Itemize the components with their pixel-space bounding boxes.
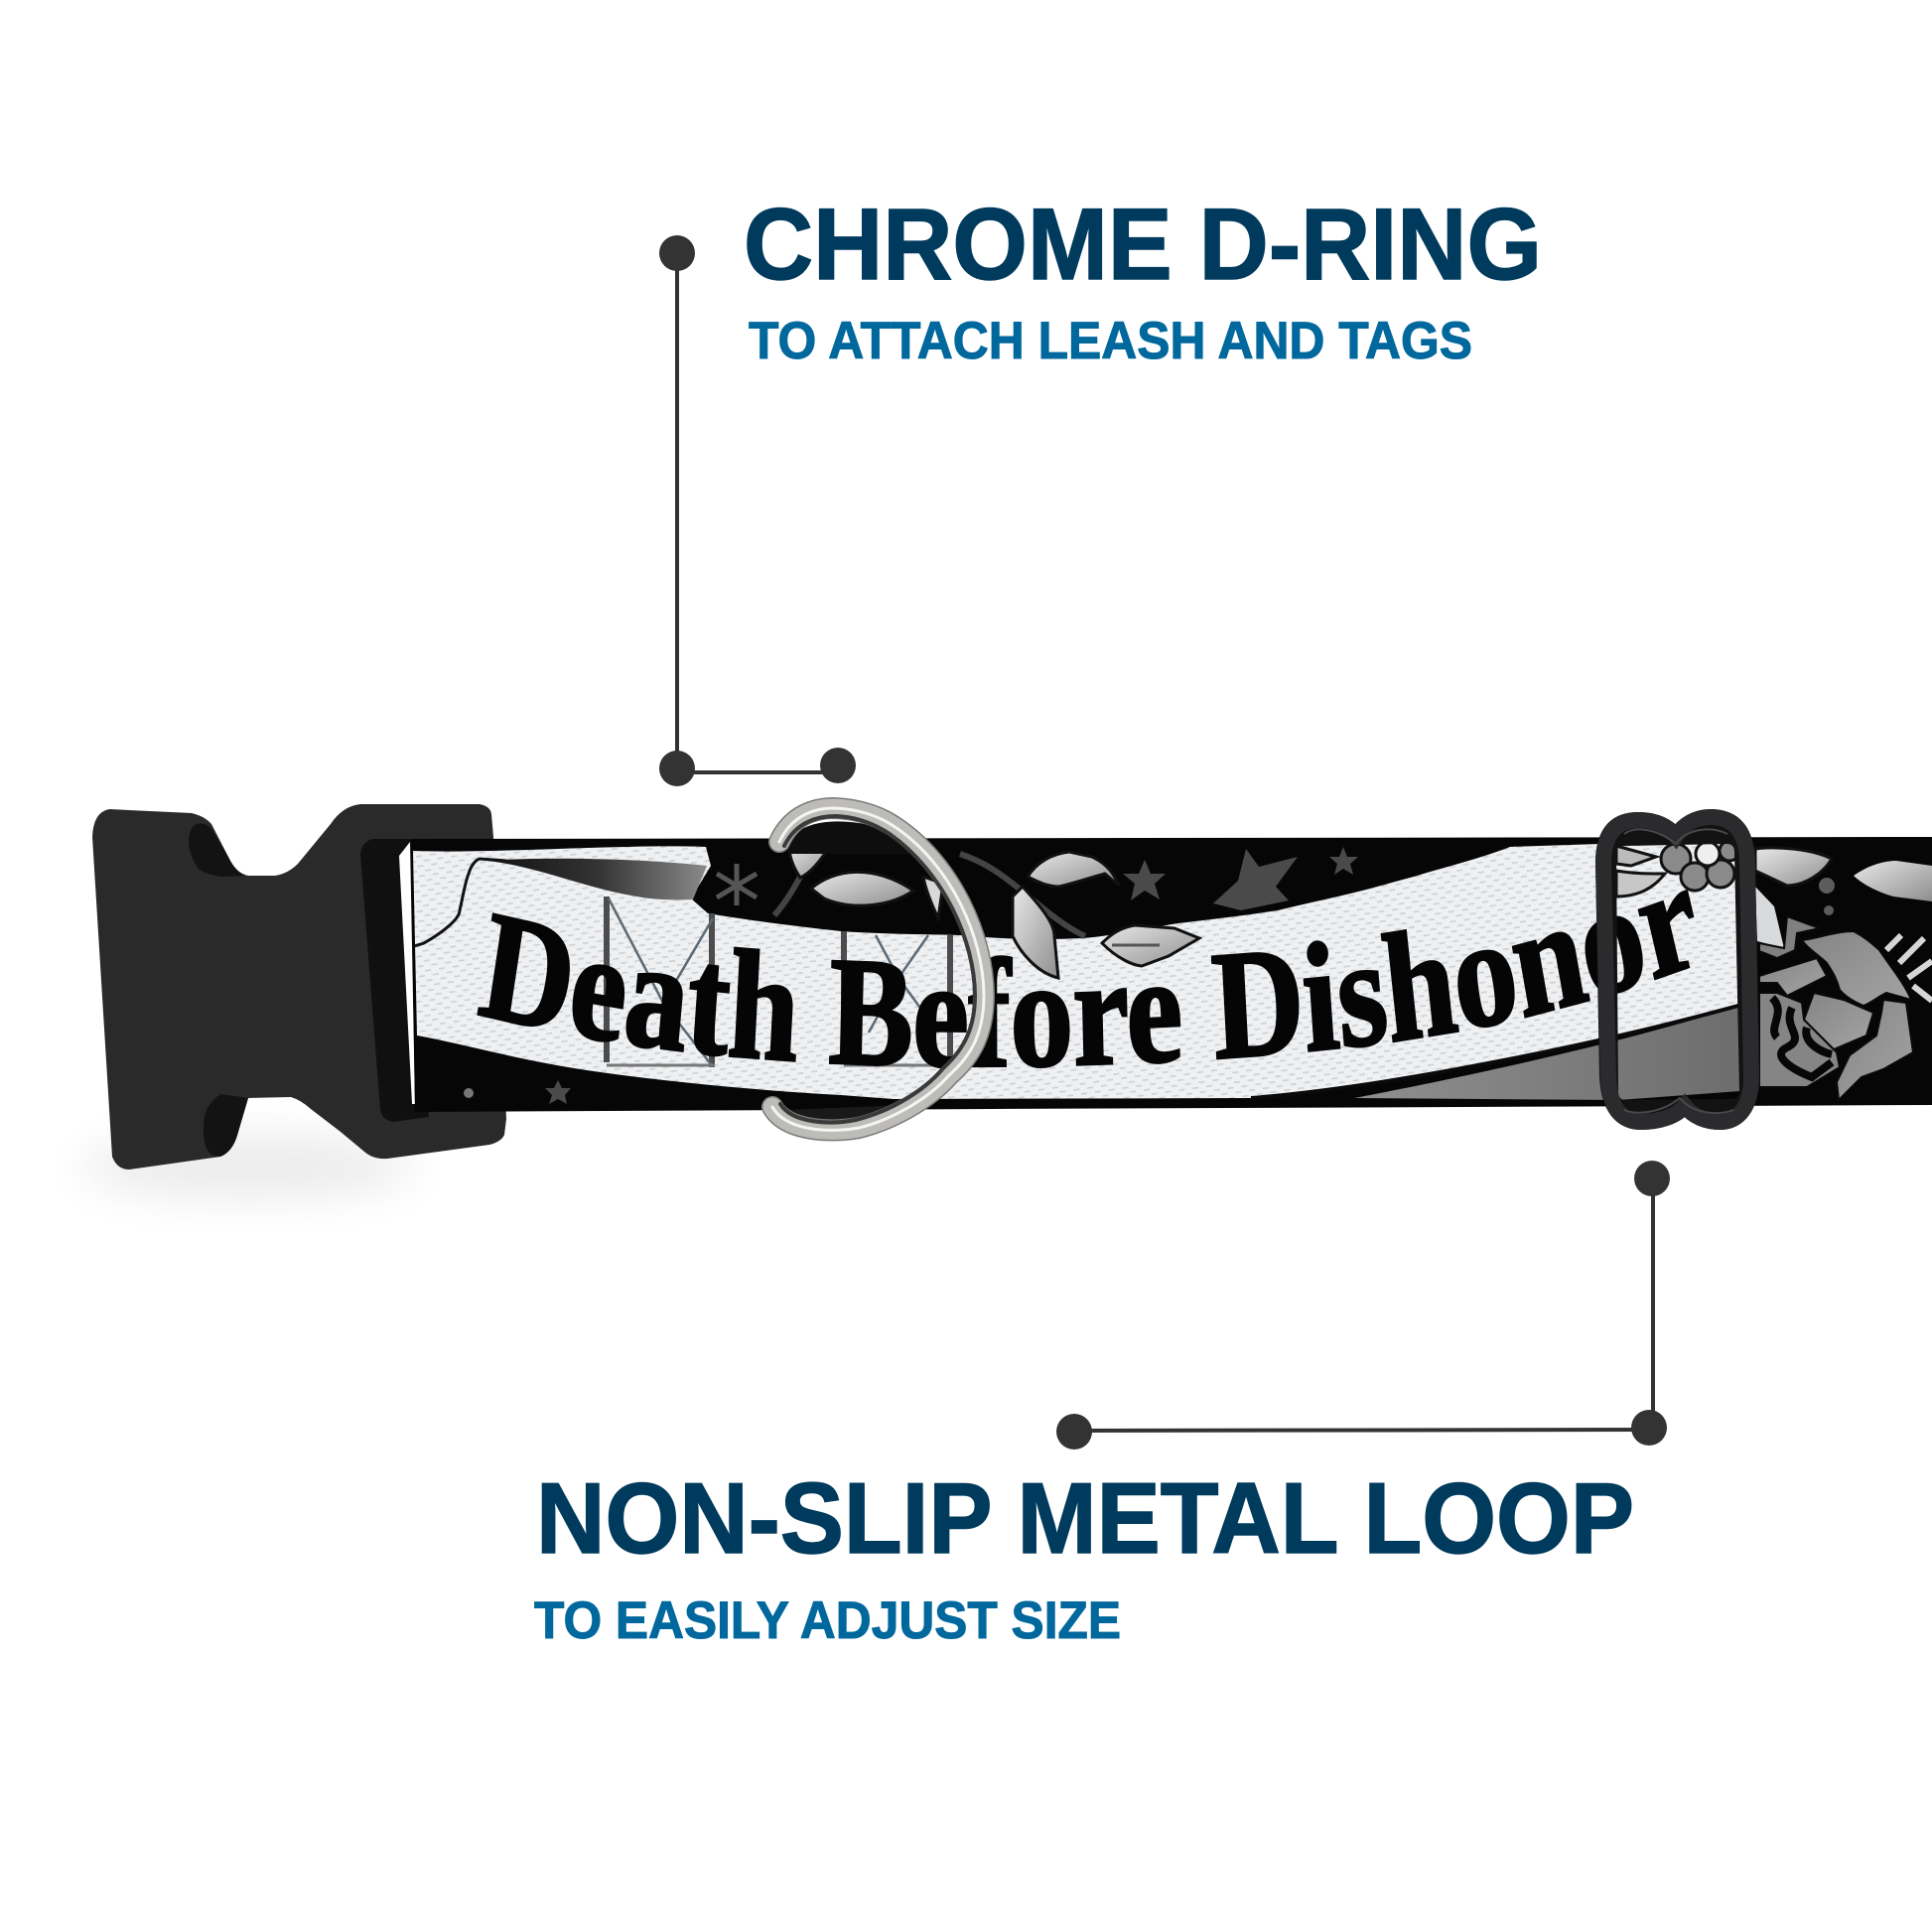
lower petal — [1837, 1000, 1913, 1100]
banner flap outline — [414, 859, 506, 946]
band petal — [1759, 958, 1827, 996]
leaf C — [1102, 925, 1199, 966]
white scroll banner — [413, 844, 1753, 1099]
subheading: adjust size: TO EASILY ADJUST SIZE — [534, 1591, 1121, 1650]
stem right of ring — [960, 854, 1085, 936]
stars — [464, 847, 1358, 1104]
dots — [1819, 878, 1835, 894]
strap base — [411, 837, 1932, 1112]
leaf B — [1013, 887, 1058, 978]
ghost stamp marks — [607, 897, 953, 1067]
small top petal — [1759, 916, 1820, 958]
callout: chrome D-ring leader — [659, 235, 856, 786]
leaf A — [1028, 852, 1119, 887]
centre petal — [1804, 993, 1873, 1049]
heading: chrome D-ring: CHROME D-RING — [744, 188, 1542, 301]
leaves and stems — [774, 843, 1932, 978]
rose — [1759, 916, 1932, 1100]
fold line — [1251, 1002, 1752, 1098]
big top petal — [1802, 931, 1911, 1006]
leaf inside loop, upper — [1616, 846, 1656, 866]
strap loop inside ring — [789, 821, 923, 854]
heading: non-slip metal loop: NON-SLIP METAL LOOP — [536, 1463, 1634, 1575]
subheading: attach leash: TO ATTACH LEASH AND TAGS — [749, 312, 1472, 370]
lower notch — [204, 1094, 248, 1157]
callout: metal loop leader — [1056, 1161, 1670, 1449]
plastic side-release buckle — [92, 804, 506, 1170]
buckle shadow — [79, 1135, 417, 1198]
far-right leaf — [1854, 861, 1932, 901]
sliver leaf behind ring — [923, 877, 943, 918]
banner curl — [486, 859, 707, 899]
flower — [1661, 841, 1739, 891]
rose thorns — [1886, 935, 1932, 1001]
pale leaf beside rose — [1755, 887, 1784, 948]
grey banner fold — [1354, 1001, 1753, 1100]
collar strap — [411, 837, 1932, 1112]
leaf behind ring, centre — [811, 872, 913, 905]
buckle slot — [360, 839, 429, 1122]
leaf behind ring, top — [789, 844, 831, 878]
swirl base — [1759, 993, 1840, 1087]
white gap — [399, 842, 415, 1104]
banner lettering: Death Before Dishonor — [477, 890, 1694, 1068]
black slider loop — [1595, 809, 1759, 1130]
leaf inside loop, lower — [1616, 871, 1665, 897]
leaf right of loop — [1755, 848, 1832, 886]
slider rim — [1603, 817, 1751, 1122]
swirl lines — [1772, 998, 1832, 1077]
stem near ring — [774, 843, 894, 915]
asterisk — [717, 864, 757, 905]
upper notch — [189, 824, 248, 877]
chrome D-ring — [772, 808, 984, 1130]
